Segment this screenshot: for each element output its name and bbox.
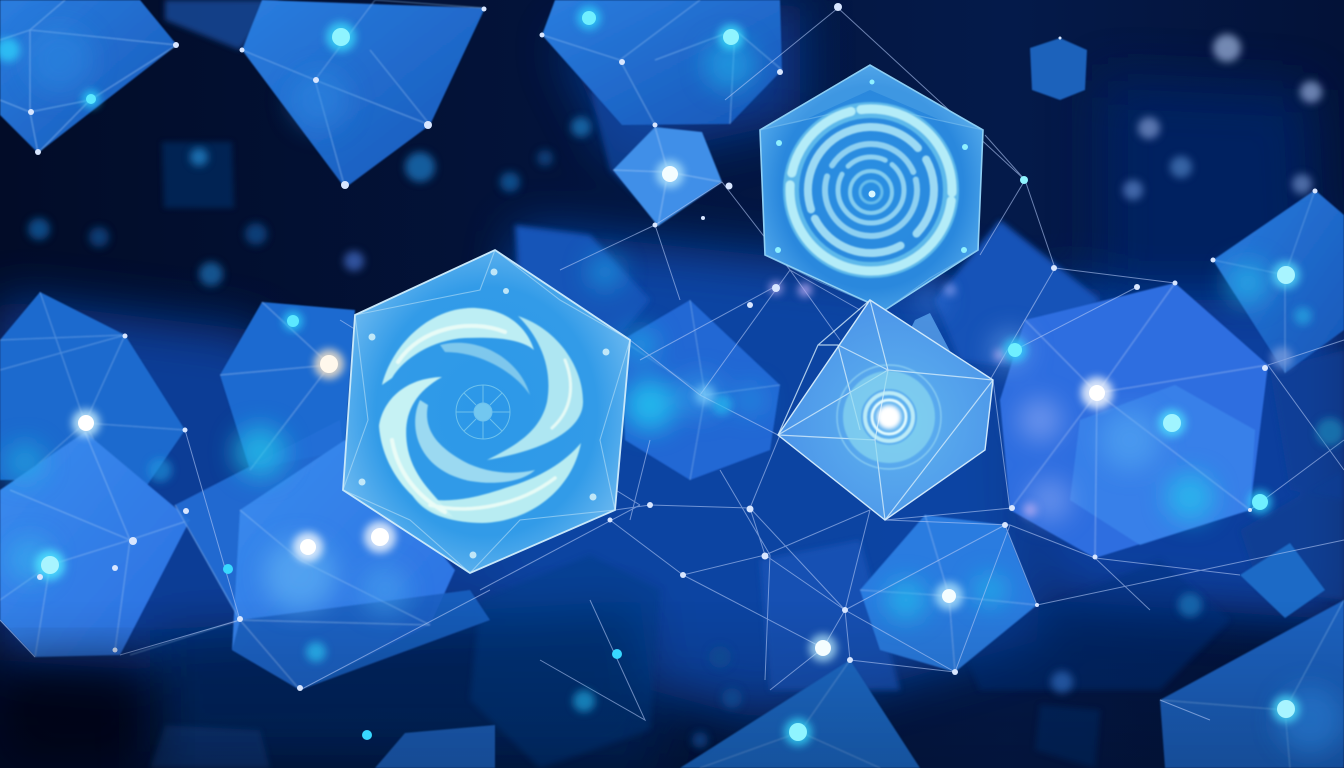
polygon: bottom centre crystal — [680, 660, 920, 768]
polygon: small cube top right — [1030, 38, 1087, 100]
main crystal: left hexagon with swirl — [343, 250, 630, 573]
swirl arms icon — [379, 308, 583, 523]
polygon: top left crystal — [0, 0, 177, 153]
polygon: right edge crystal — [1213, 190, 1344, 373]
polygon: small hexagon crystal — [613, 127, 722, 226]
polygon: top centre crystal — [542, 0, 782, 125]
polygon: top centre-left crystal — [242, 0, 485, 188]
polygon: bottom right crystal — [1160, 600, 1344, 768]
polygon: mid-left crystals — [130, 302, 490, 690]
node cores — [332, 28, 350, 46]
main crystal: diamond with glowing core — [778, 300, 993, 520]
main crystal: top hexagon with concentric rings — [758, 65, 984, 310]
polygon: small lower right crystal — [1240, 543, 1325, 618]
darkening towards the bottom — [0, 600, 1344, 768]
polygon: right large crystal — [1000, 283, 1268, 558]
glowing core rings — [837, 365, 941, 469]
corner rivets — [358, 268, 610, 558]
polygon: left upper crystal — [0, 292, 185, 510]
polygon: left lower crystal — [0, 432, 190, 657]
concentric rings icon — [758, 77, 984, 303]
polygon: central crystal — [622, 300, 780, 480]
swirl highlights — [392, 326, 571, 512]
polygon: bottom crystal — [375, 725, 495, 768]
vignette left edge — [0, 660, 150, 768]
swirl hub — [456, 385, 510, 439]
polygon: lower centre crystal — [860, 515, 1037, 672]
